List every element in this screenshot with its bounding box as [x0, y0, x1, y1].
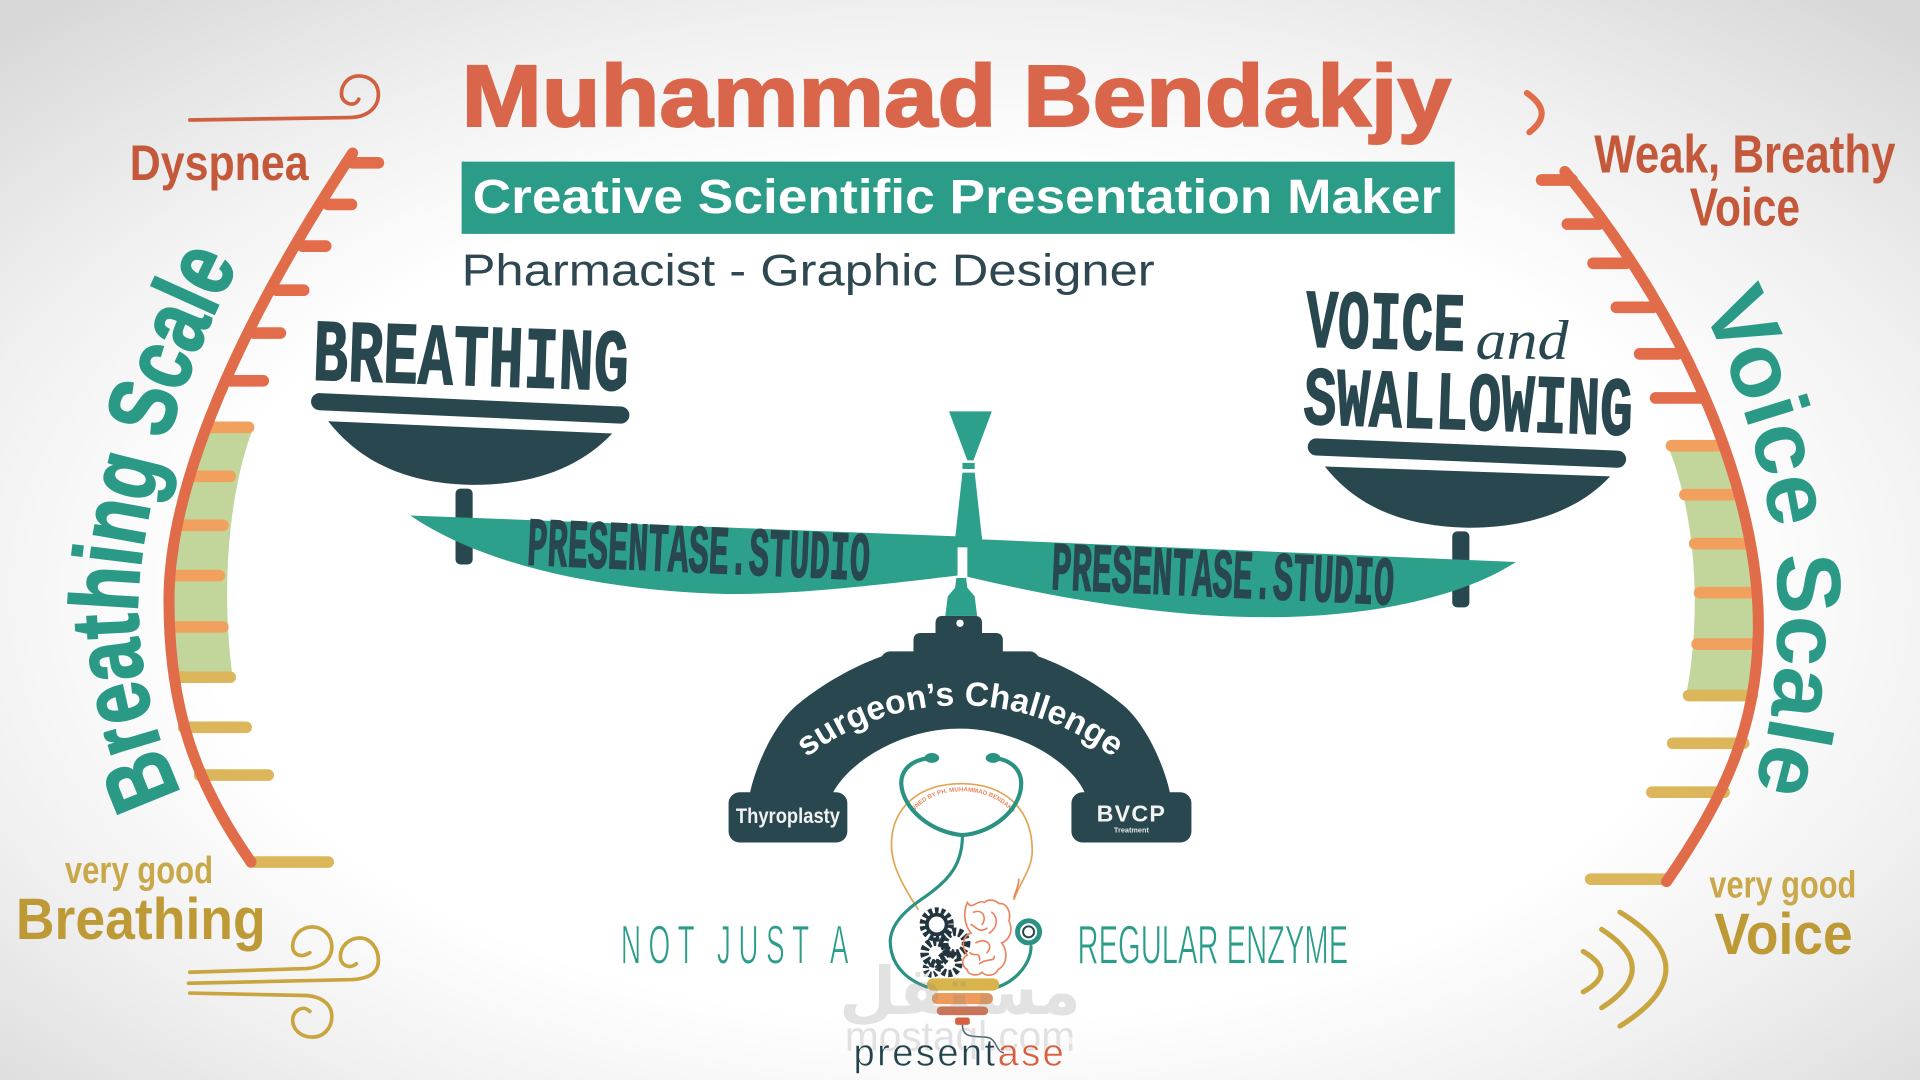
ownership arc text: OWNED BY PH. MUHAMMAD BENDAKJY — [913, 787, 1015, 812]
arch shape — [749, 616, 1171, 796]
label: weak breathy voice: Voice — [1690, 177, 1800, 237]
label: weak breathy voice — [1594, 125, 1896, 237]
stethoscope tube — [890, 758, 1031, 987]
icon: small wind swirl — [190, 76, 378, 120]
cord — [962, 1025, 1004, 1053]
pan bowl — [1325, 467, 1610, 528]
icon: wind — [189, 927, 378, 1037]
logo wordmark: presentase — [853, 1032, 1066, 1074]
gauge ticks — [170, 163, 378, 862]
panel: breathing scale gauge — [67, 148, 384, 868]
label: dyspnea: Dyspnea — [130, 135, 309, 191]
pivot hole — [956, 620, 964, 627]
logo wordmark: ® — [1066, 1035, 1075, 1045]
pan heading swallowing: SWALLOWING — [1302, 356, 1634, 461]
panel: breathing pan — [311, 308, 630, 485]
gauge arc — [169, 153, 353, 862]
panel: balance scale: PRESENTASE.STUDIO — [526, 508, 872, 601]
pan heading: BREATHING — [311, 308, 630, 418]
tagline left: NOT JUST A — [621, 914, 856, 976]
treatment label: Treatment — [1114, 826, 1149, 835]
label: very good breathing: very good — [65, 850, 213, 892]
role text: Pharmacist - Graphic Designer — [462, 246, 1155, 295]
icon: sound waves — [1583, 912, 1666, 1026]
tagline right: REGULAR ENZYME — [1078, 914, 1348, 976]
brain — [963, 879, 1019, 975]
subtitle banner — [462, 162, 1455, 234]
green zone — [169, 427, 253, 677]
bvcp label: BVCP — [1097, 801, 1166, 827]
balance beam — [410, 516, 1516, 617]
arch label: surgeon’s Challenge — [800, 682, 1120, 755]
label: very good voice — [1709, 865, 1856, 967]
left foot — [729, 792, 847, 842]
left pan post — [456, 489, 473, 564]
bulb base bands — [927, 978, 999, 991]
pan heading and: and — [1476, 310, 1570, 372]
label: very good breathing: Breathing — [16, 887, 266, 952]
title: Muhammad Bendakjy — [462, 48, 1451, 145]
panel: voice and swallowing pan — [1302, 279, 1634, 528]
pan heading voice: VOICE — [1305, 279, 1466, 377]
watermark: mostaql.com — [845, 1013, 1075, 1060]
panel: balance scale: PRESENTASE.STUDIO — [1050, 532, 1396, 626]
pan bar — [320, 402, 621, 415]
panel: surgeon's challenge base — [728, 616, 1192, 842]
gauge arc — [1565, 171, 1758, 882]
label: very good breathing — [16, 850, 266, 952]
scale label: Breathing Scale — [67, 250, 234, 816]
subtitle banner: Creative Scientific Presentation Maker — [473, 171, 1441, 224]
right foot — [1071, 792, 1191, 842]
gears — [923, 911, 966, 975]
scale label: Voice Scale — [1711, 280, 1841, 793]
pan bar — [1316, 447, 1618, 459]
right pan post — [1452, 531, 1469, 607]
watermark: مستقل — [839, 953, 1081, 1030]
gauge ticks — [1542, 180, 1756, 879]
thyroplasty label: Thyroplasty — [736, 805, 840, 828]
bulb outline — [891, 784, 1032, 910]
panel: voice scale gauge — [1536, 166, 1841, 888]
green zone — [1668, 446, 1757, 696]
label: very good voice: very good — [1709, 865, 1856, 907]
label: very good voice: Voice — [1714, 902, 1853, 967]
icon: presentase bulb logo — [888, 753, 1042, 1054]
pan bowl — [328, 421, 612, 485]
panel: balance scale — [410, 411, 1516, 626]
chest piece — [1018, 921, 1040, 943]
icon: small sound wave — [1527, 93, 1542, 132]
ear tips — [924, 753, 1000, 763]
stand column — [945, 411, 992, 616]
